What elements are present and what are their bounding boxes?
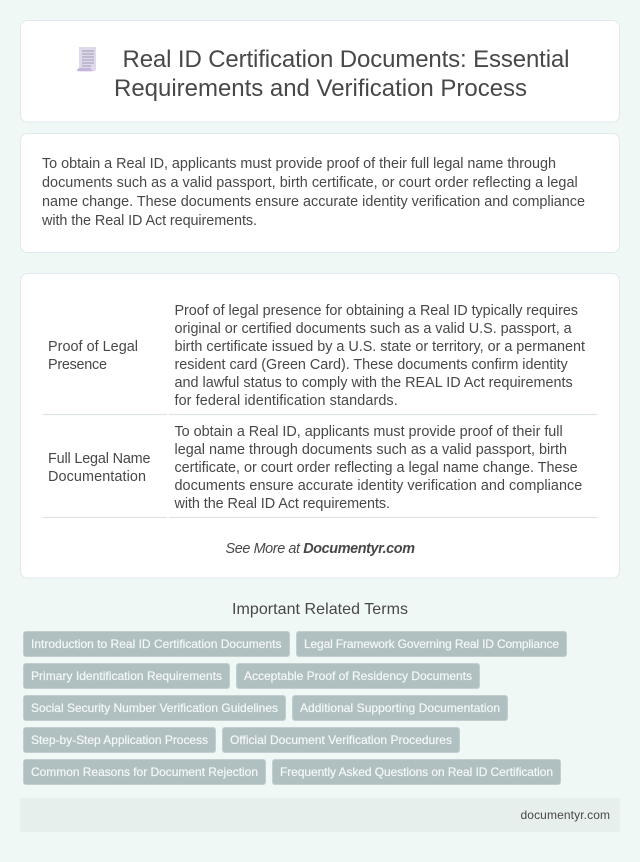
- tag: Frequently Asked Questions on Real ID Certification: [280, 765, 553, 779]
- tag: Step-by-Step Application Process: [31, 733, 208, 747]
- tag: Common Reasons for Document Rejection: [31, 765, 258, 779]
- tag: [24, 760, 266, 784]
- row label: [48, 451, 150, 485]
- tag: Official Document Verification Procedures: [230, 733, 452, 747]
- tag: [24, 728, 216, 752]
- table row: full legal name documentation: [48, 424, 582, 512]
- panel: introduction: [20, 134, 620, 252]
- row description: legal name through documents such as a valid passport, birth: [174, 442, 567, 458]
- tag: Additional Supporting Documentation: [300, 701, 500, 715]
- tag: [222, 728, 460, 752]
- title: Requirements and Verification Process: [114, 75, 527, 102]
- row description: Proof of legal presence for obtaining a Real ID typically requires: [174, 303, 578, 319]
- tag: [24, 664, 230, 688]
- row description: and lawful status to comply with the REAL ID Act requirements: [174, 375, 573, 391]
- row description: [174, 303, 585, 409]
- row label: [48, 339, 138, 373]
- footer bar: [20, 798, 620, 832]
- tag: Acceptable Proof of Residency Documents: [244, 669, 472, 683]
- intro text: documents such as a valid passport, birth certificate, or court order reflecting a legal: [42, 175, 578, 191]
- see more link: See More at Documentyr.com: [226, 541, 415, 557]
- row description: for federal identification standards.: [174, 393, 398, 409]
- tag: [236, 664, 480, 688]
- tag: [24, 632, 290, 656]
- intro text: name change. These documents ensure accurate identity verification and compliance: [42, 194, 585, 210]
- tag: [292, 696, 508, 720]
- title: Real ID Certification Documents: Essential: [122, 46, 570, 73]
- row description: with the Real ID Act requirements.: [174, 496, 390, 512]
- intro text: with the Real ID Act requirements.: [41, 213, 257, 229]
- row label: Full Legal Name: [48, 451, 150, 467]
- tag: [24, 696, 286, 720]
- row description: [174, 424, 582, 512]
- title: [114, 46, 570, 102]
- row description: To obtain a Real ID, applicants must provide proof of their full: [174, 424, 563, 440]
- row label: Proof of Legal: [48, 339, 138, 355]
- tag: [272, 760, 560, 784]
- row description: documents ensure accurate identity verification and compliance: [174, 478, 582, 494]
- row description: resident card (Green Card). These documents confirm identity: [174, 357, 568, 373]
- row description: certificate, or court order reflecting a legal name change. These: [174, 460, 578, 476]
- tag: Primary Identification Requirements: [31, 669, 222, 683]
- table row: proof of legal presence: [48, 303, 585, 409]
- row label: Documentation: [48, 469, 146, 485]
- tag: Introduction to Real ID Certification Documents: [31, 637, 282, 651]
- panel: document table: [20, 274, 620, 578]
- tag: Legal Framework Governing Real ID Compliance: [304, 637, 559, 651]
- related term tags: [24, 632, 566, 784]
- footer bar: documentyr.com: [520, 808, 610, 822]
- tag: Social Security Number Verification Guidelines: [31, 701, 278, 715]
- row description: birth certificate issued by a U.S. state or territory, or a permanent: [174, 339, 585, 355]
- row description: original or certified documents such as a valid U.S. passport, a: [174, 321, 572, 337]
- tag: [296, 632, 566, 656]
- intro text: To obtain a Real ID, applicants must provide proof of their full legal name through: [42, 156, 556, 172]
- row label: Presence: [48, 357, 107, 373]
- panel: title header: [20, 20, 620, 122]
- icon: document scroll: [77, 47, 96, 71]
- intro text: [41, 156, 585, 229]
- heading: important related terms: Important Related Terms: [232, 601, 408, 618]
